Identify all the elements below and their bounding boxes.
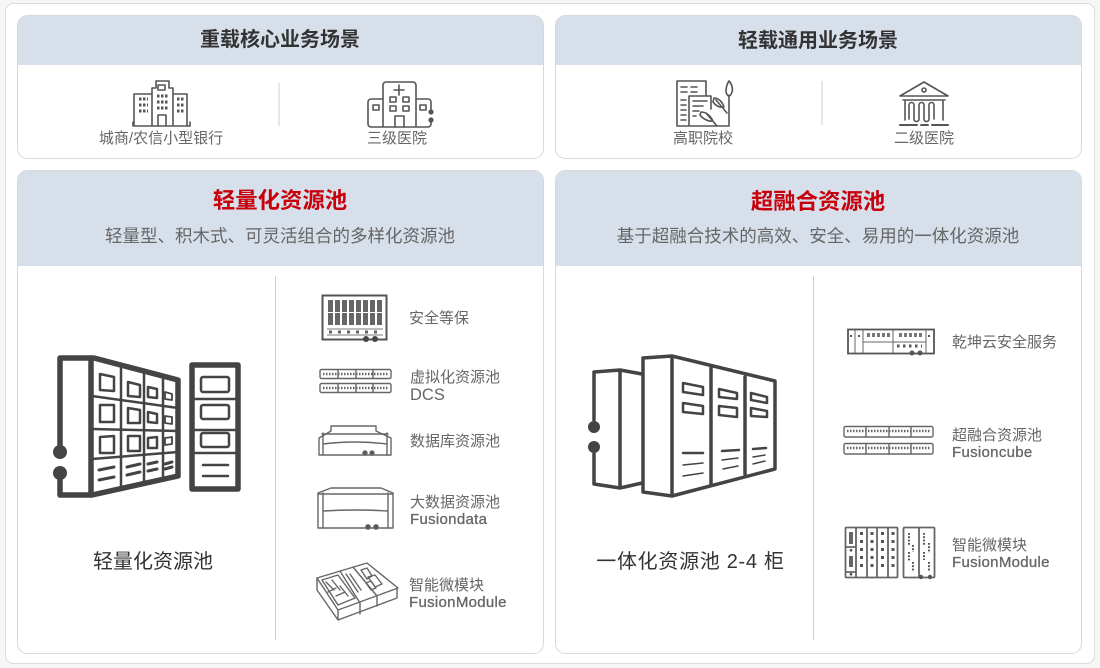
label: FusionModule <box>952 536 1050 571</box>
label: Qiankun cloud security: 乾坤云安全服务 <box>952 333 1057 351</box>
label: city commercial bank: 城商/农信小型银行 <box>99 130 223 147</box>
panel: heavy-load core business scenarios <box>18 16 544 158</box>
label: Fusioncube <box>952 427 1042 461</box>
icon: tertiary hospital <box>368 82 433 127</box>
label: database pool: 数据库资源池 <box>410 433 500 450</box>
subheading: hyper-converged: 基于超融合技术的高效、安全、易用的一体化资源池 <box>617 226 1019 246</box>
label: virtual pool DCS <box>410 369 500 404</box>
heading: lightweight resource pool: 轻量化资源池 <box>213 188 347 213</box>
icon: bank building <box>133 81 190 126</box>
label: tertiary hospital: 三级医院 <box>367 129 427 147</box>
label: secondary hospital: 二级医院 <box>894 129 954 147</box>
icon: Fusioncube servers <box>844 426 933 454</box>
heading: hyper-converged resource pool: 超融合资源池 <box>751 189 885 214</box>
icon: vocational college <box>677 81 732 126</box>
label: vocational college: 高职院校 <box>673 129 733 147</box>
panel header: hyper-converged <box>556 171 1081 266</box>
icon: integrated rack cluster <box>588 356 775 496</box>
icon: big data server <box>318 488 393 529</box>
label: Fusioncube: Fusioncube <box>952 444 1033 461</box>
icon: database server <box>319 426 391 455</box>
label: integrated resource pool 2-4 racks: 一体化资源池 2-4 柜 <box>596 550 785 573</box>
label: micro module <box>409 576 507 611</box>
label: lightweight resource pool: 轻量化资源池 <box>93 550 213 573</box>
label: FusionModule: FusionModule <box>952 554 1050 571</box>
label: virtual pool DCS: DCS <box>410 386 445 404</box>
label: micro module: FusionModule <box>409 594 507 611</box>
label: big data pool: 大数据资源池 <box>410 494 500 511</box>
label: security: 安全等保 <box>409 309 469 327</box>
icon: virtual servers <box>320 370 391 392</box>
label: big data pool <box>410 494 500 528</box>
label: big data pool: Fusiondata <box>410 511 488 528</box>
label: Fusioncube: 超融合资源池 <box>952 427 1042 444</box>
icon: lightweight rack cluster <box>53 358 238 495</box>
icon: secondary hospital <box>900 82 948 125</box>
label: virtual pool DCS: 虚拟化资源池 <box>410 369 500 386</box>
panel header: lightweight <box>18 171 543 266</box>
panel: lightweight resource pool <box>18 170 544 654</box>
heading: heavy-load: 重载核心业务场景 <box>200 27 360 51</box>
heading: light-load: 轻载通用业务场景 <box>738 29 898 52</box>
panel header: heavy-load <box>18 16 543 65</box>
icon: FusionModule racks <box>846 528 934 579</box>
subheading: lightweight: 轻量型、积木式、可灵活组合的多样化资源池 <box>105 226 455 246</box>
label: FusionModule: 智能微模块 <box>952 536 1027 554</box>
icon: Qiankun security appliance <box>848 330 934 356</box>
icon: micro module <box>317 563 398 620</box>
panel: light-load general business scenarios <box>556 16 1082 158</box>
panel: hyper-converged resource pool <box>556 170 1082 654</box>
label: micro module: 智能微模块 <box>409 576 484 594</box>
icon: security rack <box>322 296 386 342</box>
panel header: light-load <box>556 16 1081 65</box>
